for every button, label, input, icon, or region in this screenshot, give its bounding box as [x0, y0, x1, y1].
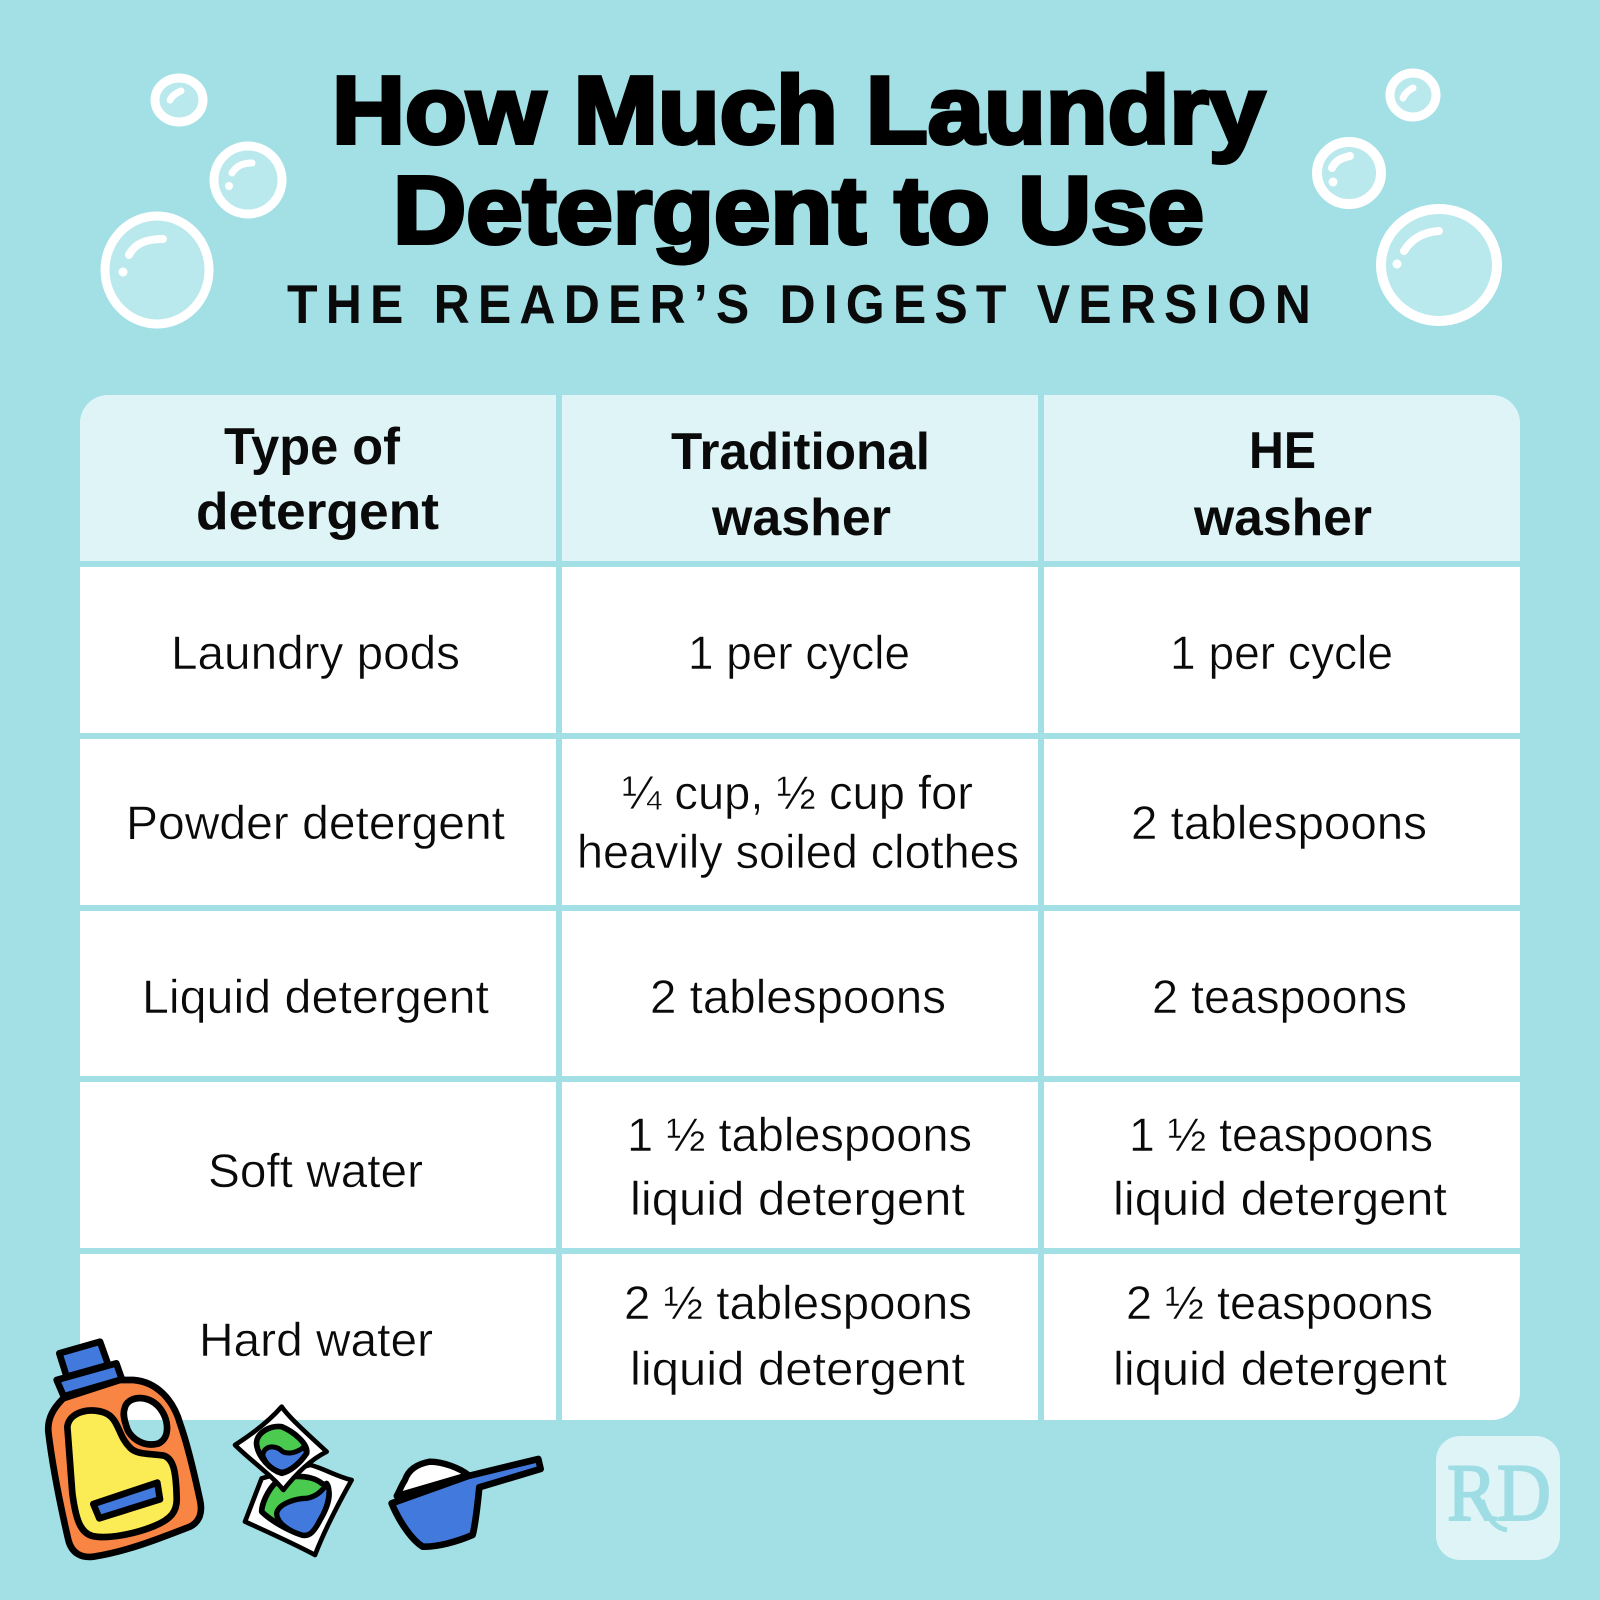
row: laundry pods: 1 per cycle	[1170, 626, 1393, 679]
row: powder detergent: Powder detergent	[126, 796, 505, 849]
table header text: Traditional	[671, 423, 930, 481]
row: soft water: Soft water	[208, 1144, 423, 1197]
title: How Much Laundry	[332, 57, 1265, 164]
row: powder detergent: heavily soiled clothes	[577, 825, 1019, 878]
logo: RD badge: RD	[1447, 1447, 1551, 1538]
row: soft water	[208, 1108, 1447, 1225]
logo: RD badge	[1436, 1436, 1560, 1560]
row: soft water: 1 ½ tablespoons	[627, 1108, 972, 1161]
icon: bubbles left	[105, 78, 282, 324]
row: soft water: liquid detergent	[630, 1172, 965, 1225]
table header text: detergent	[196, 483, 439, 541]
table header text: washer	[711, 489, 891, 547]
table header text	[196, 418, 1372, 547]
subtitle: THE READER’S DIGEST VERSION	[287, 273, 1319, 335]
row: hard water: Hard water	[199, 1313, 433, 1366]
title: Detergent to Use	[393, 157, 1204, 264]
icon: detergent bottle	[48, 1342, 201, 1557]
table header text: washer	[1193, 489, 1372, 547]
row: liquid detergent: Liquid detergent	[142, 970, 489, 1023]
row: powder detergent: ¼ cup, ½ cup for	[622, 766, 973, 819]
row: liquid detergent: 2 tablespoons	[650, 970, 946, 1023]
icon: powder scoop	[392, 1459, 541, 1547]
table header text: HE	[1249, 422, 1316, 480]
table panel	[80, 395, 1520, 1420]
row: liquid detergent	[142, 970, 1407, 1023]
row: powder detergent: 2 tablespoons	[1131, 796, 1427, 849]
table body cells	[80, 567, 1520, 1420]
icon: laundry pods	[235, 1407, 352, 1555]
row: hard water: liquid detergent	[1113, 1342, 1447, 1395]
row: laundry pods: 1 per cycle	[688, 626, 910, 679]
row: powder detergent	[126, 766, 1427, 878]
table header cells	[80, 395, 1520, 561]
table header text: Type of	[224, 418, 401, 476]
row: hard water	[199, 1276, 1447, 1395]
row: hard water: 2 ½ teaspoons	[1126, 1276, 1433, 1329]
row: hard water: 2 ½ tablespoons	[624, 1276, 972, 1329]
row: soft water: 1 ½ teaspoons	[1129, 1108, 1433, 1161]
row: laundry pods	[171, 626, 1393, 679]
row: liquid detergent: 2 teaspoons	[1152, 970, 1407, 1023]
icon: bubbles right	[1317, 73, 1497, 321]
row: soft water: liquid detergent	[1113, 1172, 1447, 1225]
title	[332, 57, 1265, 264]
row: hard water: liquid detergent	[630, 1342, 965, 1395]
row: laundry pods: Laundry pods	[171, 626, 460, 679]
